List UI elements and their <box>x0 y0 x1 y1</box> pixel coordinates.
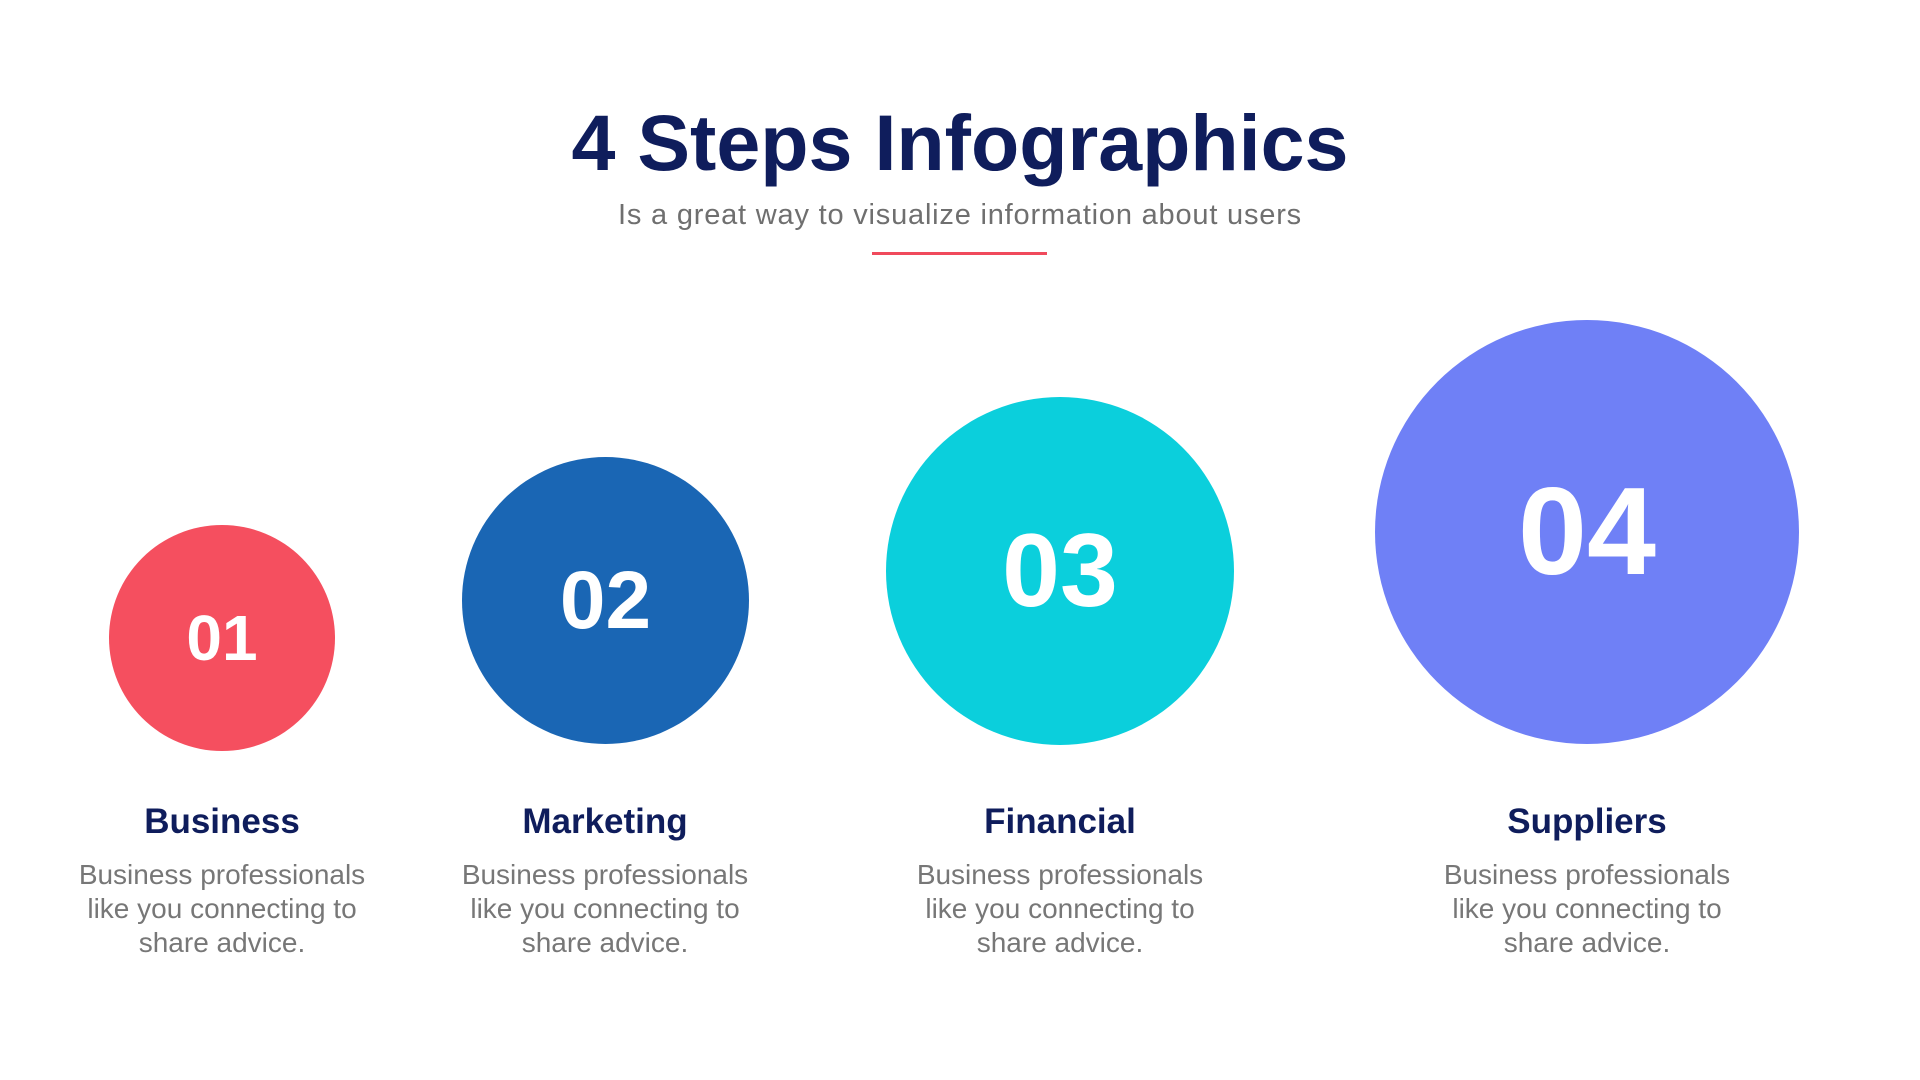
step 3 text: like you connecting to <box>925 893 1195 924</box>
step 2 text: like you connecting to <box>470 893 740 924</box>
circle 03: 03 <box>1002 512 1118 628</box>
step 4 text <box>1444 859 1730 958</box>
step 1 text: Business professionals <box>79 859 365 890</box>
step 4 text: Business professionals <box>1444 859 1730 890</box>
step 2 text: share advice. <box>522 927 688 958</box>
circle 04 <box>1375 320 1799 744</box>
step 3 text: share advice. <box>977 927 1143 958</box>
circle 02 <box>462 457 749 744</box>
step 1 text: share advice. <box>139 927 305 958</box>
step 4 text: share advice. <box>1504 927 1670 958</box>
accent line <box>872 252 1047 255</box>
step 4 text: like you connecting to <box>1452 893 1722 924</box>
step 3 text: Business professionals <box>917 859 1203 890</box>
step 2 text: Business professionals <box>462 859 748 890</box>
step 2 label: Marketing <box>522 802 688 841</box>
step 4 label: Suppliers <box>1507 802 1667 841</box>
circle 02: 02 <box>560 554 651 646</box>
subtitle: Is a great way to visualize information about users <box>618 199 1302 231</box>
circle 04: 04 <box>1518 463 1656 601</box>
step 2 text <box>462 859 748 958</box>
step 1 text: like you connecting to <box>87 893 357 924</box>
step 1 text <box>79 859 365 958</box>
circle 01 <box>109 525 335 751</box>
circle 01: 01 <box>186 602 258 674</box>
step 1 label: Business <box>144 802 300 841</box>
step 3 text <box>917 859 1203 958</box>
title: 4 Steps Infographics <box>571 98 1348 187</box>
step 3 label: Financial <box>984 802 1136 841</box>
circle 03 <box>886 397 1234 745</box>
